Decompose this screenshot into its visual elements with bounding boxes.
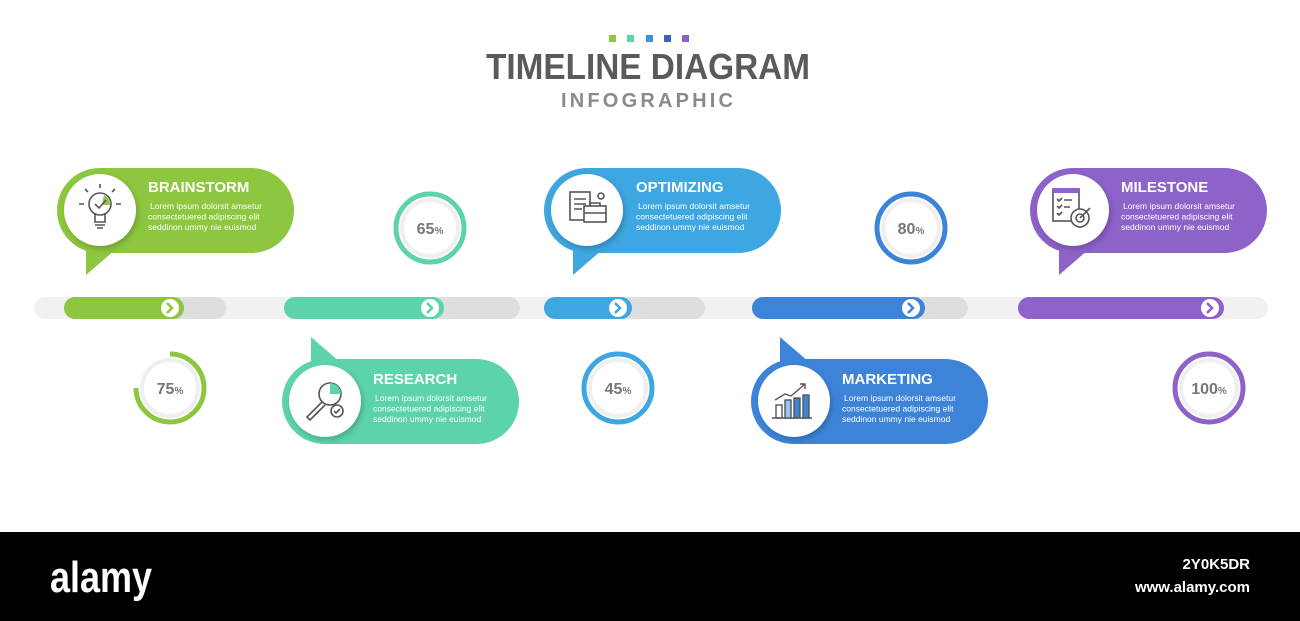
callout: marketing: seddinon ummy nie euismod xyxy=(842,414,950,424)
callout: research: Lorem ipsum dolorsit amsetur xyxy=(375,393,487,403)
callout: marketing: MARKETING xyxy=(842,371,933,388)
segment 2 xyxy=(284,297,520,319)
callout: milestone: Lorem ipsum dolorsit amsetur xyxy=(1123,201,1235,211)
percent: 75 xyxy=(136,354,204,422)
callout: milestone: MILESTONE xyxy=(1121,179,1208,196)
percent: 45: 45% xyxy=(605,381,631,398)
segment 3 xyxy=(544,297,705,319)
callout: marketing: consectetuered adipiscing elit xyxy=(842,404,954,414)
segment 5 xyxy=(1018,297,1224,319)
footer band: 2Y0K5DR xyxy=(1182,556,1250,573)
callout: marketing: Lorem ipsum dolorsit amsetur xyxy=(844,393,956,403)
callout: optimizing: Lorem ipsum dolorsit amsetur xyxy=(638,201,750,211)
icon: magnifier xyxy=(307,383,343,420)
callout: brainstorm: seddinon ummy nie euismod xyxy=(148,222,256,232)
percent: 80 xyxy=(877,194,945,262)
percent: 100 xyxy=(1175,354,1243,422)
percent: 100: 100% xyxy=(1191,381,1227,398)
percent: 65 xyxy=(396,194,464,262)
callout: research: RESEARCH xyxy=(373,371,457,388)
percent: 45 xyxy=(584,354,652,422)
footer band: alamy xyxy=(50,553,152,602)
callout: brainstorm: BRAINSTORM xyxy=(148,179,249,196)
callout: brainstorm: Lorem ipsum dolorsit amsetur xyxy=(150,201,262,211)
footer band: www.alamy.com xyxy=(1134,579,1250,596)
icon: growth chart xyxy=(772,384,812,418)
footer band xyxy=(0,532,1300,621)
callout: brainstorm: consectetuered adipiscing elit xyxy=(148,212,260,222)
callout: milestone xyxy=(1030,168,1267,275)
icon: checklist target xyxy=(1053,188,1090,227)
subtitle: INFOGRAPHIC xyxy=(561,90,733,112)
callout: brainstorm xyxy=(57,168,294,275)
callout: optimizing: consectetuered adipiscing elit xyxy=(636,212,748,222)
percent: 80: 80% xyxy=(898,221,924,238)
segment 4 xyxy=(752,297,968,319)
callout: research xyxy=(282,337,519,444)
timeline track xyxy=(34,297,1268,319)
icon: light bulb xyxy=(79,184,121,228)
segment 1 xyxy=(64,297,226,319)
percent: 75: 75% xyxy=(157,381,183,398)
header xyxy=(486,35,810,112)
icon: briefcase document xyxy=(570,192,606,222)
callout: research: seddinon ummy nie euismod xyxy=(373,414,481,424)
callout: optimizing xyxy=(544,168,781,275)
callout: marketing xyxy=(751,337,988,444)
percent: 65: 65% xyxy=(417,221,443,238)
title: TIMELINE DIAGRAM xyxy=(486,46,810,87)
callout: optimizing: OPTIMIZING xyxy=(636,179,724,196)
callout: optimizing: seddinon ummy nie euismod xyxy=(636,222,744,232)
callout: milestone: consectetuered adipiscing elit xyxy=(1121,212,1233,222)
color squares xyxy=(609,35,689,42)
callout: research: consectetuered adipiscing elit xyxy=(373,404,485,414)
callout: milestone: seddinon ummy nie euismod xyxy=(1121,222,1229,232)
